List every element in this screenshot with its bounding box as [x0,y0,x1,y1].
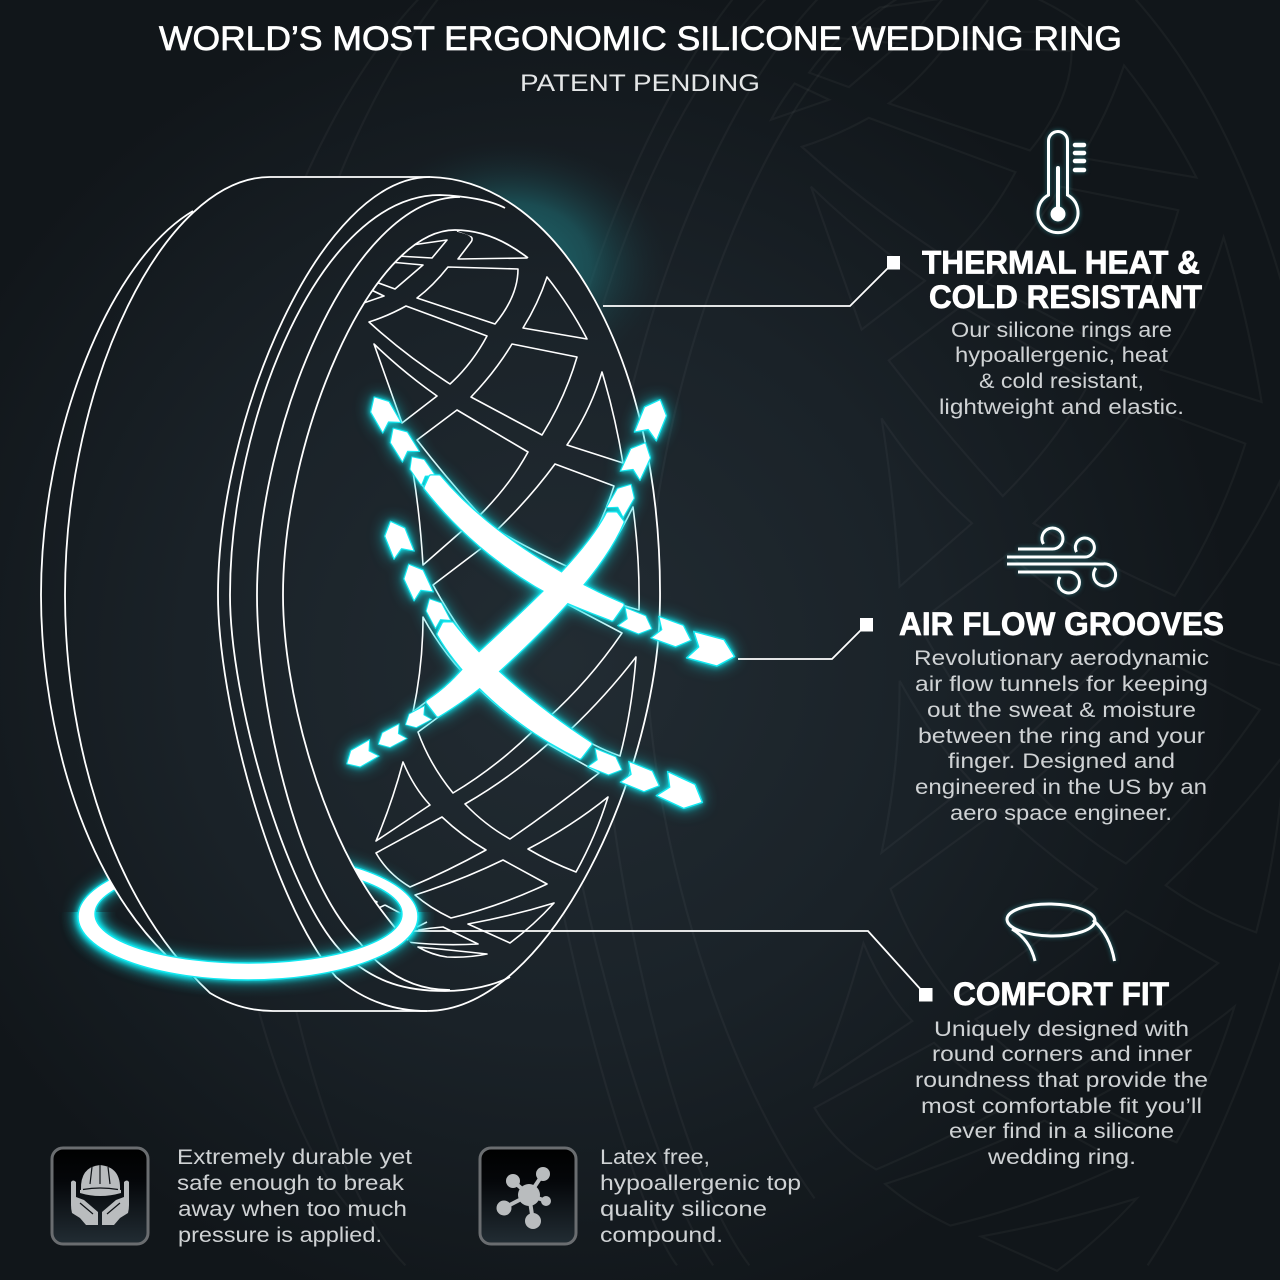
teal glow behind ring [350,140,670,390]
text: air flow description [914,646,1209,825]
callout: thermal [603,132,1202,419]
text: air flow description: aero space engineer. [950,801,1172,825]
text: latex free: compound. [600,1223,723,1247]
chevrons: band two [342,395,671,772]
text: durable [177,1145,412,1247]
panel: durable feature [52,1145,412,1247]
text: comfort fit description: round corners and inner [932,1042,1192,1066]
icon: thermometer [1038,132,1084,233]
icon: ring cross-section [1007,903,1114,961]
callout: comfort fit [915,903,1208,1169]
text: comfort fit description: ever find in a silicone [949,1119,1174,1143]
ring groove cells [347,231,639,957]
text: air flow description: between the ring and your [918,724,1205,748]
heading: thermal: COLD RESISTANT [929,279,1202,315]
text: latex free: hypoallergenic top [600,1171,801,1195]
ring silhouette fill [41,177,660,1011]
icon: molecule [480,1148,576,1244]
text: thermal description: hypoallergenic, heat [955,343,1168,367]
text: air flow description: engineered in the US by an [915,775,1207,799]
text: comfort fit description: Uniquely designed with [934,1017,1189,1041]
text: durable: away when too much [178,1197,407,1221]
panel: latex free feature [480,1145,801,1247]
marker: comfort fit [919,988,932,1002]
text: thermal description: & cold resistant, [979,369,1144,393]
chevrons: band three [380,517,708,814]
text: durable: safe enough to break [177,1171,404,1195]
text: comfort fit description: roundness that provide the [915,1068,1208,1092]
heading: air flow: AIR FLOW GROOVES [899,606,1224,642]
marker: thermal [887,256,900,270]
text: comfort fit description [915,1017,1208,1169]
text: latex free [600,1145,801,1247]
heading: thermal: THERMAL HEAT & [922,244,1200,280]
callout: air flow [738,528,1224,825]
text: air flow description: out the sweat & moisture [927,698,1196,722]
icon: wind [1007,528,1116,593]
text: latex free: Latex free, [600,1145,710,1169]
text: durable: Extremely durable yet [177,1145,412,1169]
ring illustration [41,177,923,1011]
text: comfort fit description: most comfortable fit you’ll [921,1094,1202,1118]
marker: air flow [860,618,873,632]
ring body occluder [41,177,528,1011]
heading: comfort fit: COMFORT FIT [953,976,1169,1012]
airflow bands, cyan edge [426,477,622,757]
text: thermal description: Our silicone rings are [951,318,1172,342]
ring contour lines [41,177,660,1011]
title: WORLD’S MOST ERGONOMIC SILICONE WEDDING RING [159,20,1122,58]
text: comfort fit description: wedding ring. [987,1145,1136,1169]
glowing air flow arrows [342,392,738,814]
leader line: thermal [603,263,893,306]
leader line: comfort fit [412,931,923,992]
text: durable: pressure is applied. [178,1223,382,1247]
chevrons: band one [365,392,738,670]
icon: helmet and hands [52,1148,148,1244]
text: latex free: quality silicone [600,1197,767,1221]
text: air flow description: air flow tunnels for keeping [915,672,1208,696]
airflow bands, white core [426,477,622,757]
halo ring, front half [66,912,430,993]
leader line: air flow [738,625,866,659]
text: air flow description: finger. Designed and [948,749,1175,773]
heading: thermal [922,244,1202,315]
text: thermal description: lightweight and elastic. [939,395,1184,419]
halo ring, back half [78,853,418,980]
text: thermal description [939,318,1184,419]
subtitle: PATENT PENDING [520,70,760,97]
text: air flow description: Revolutionary aerodynamic [914,646,1209,670]
